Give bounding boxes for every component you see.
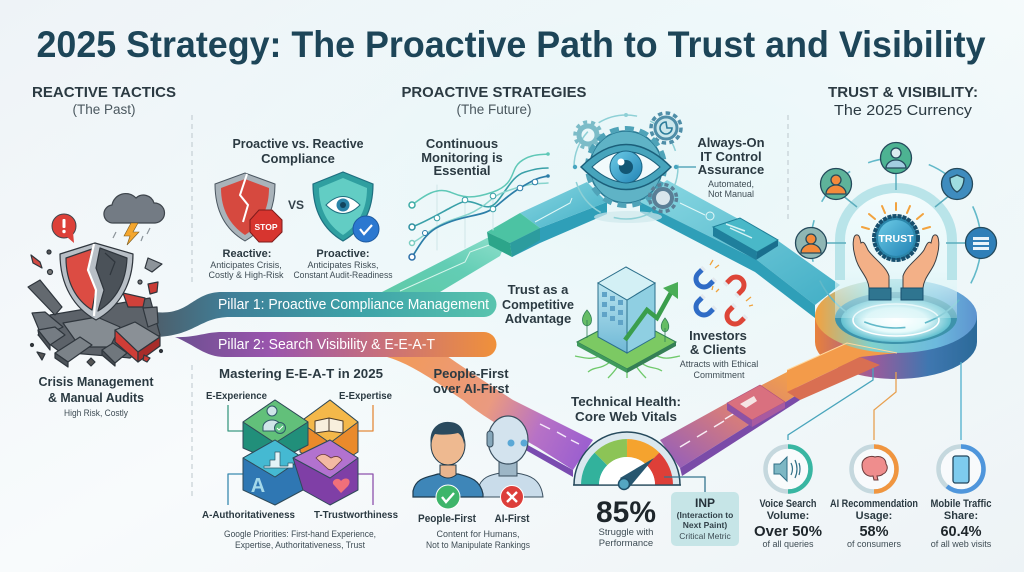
text: proactive vs reactive heading: Proactive vs. Reactive	[232, 136, 364, 151]
stat: 85 percent: 85%	[596, 496, 656, 529]
text: trust as competitive advantage: Trust as a	[508, 282, 569, 297]
text: google priorities: Google Priorities: First-hand Experience,	[224, 529, 376, 539]
text: people-first heading: People-First	[433, 366, 509, 381]
heading: proactive strategies: PROACTIVE STRATEGIES	[402, 84, 586, 101]
text: always-on assurance: Always-On	[697, 135, 765, 150]
line chart: monitoring	[409, 152, 550, 260]
text: proactive caption: Proactive:	[316, 248, 370, 260]
stat: mobile traffic: of all web visits	[931, 539, 992, 549]
stat: mobile traffic	[930, 446, 992, 549]
upper proactive road	[382, 180, 840, 318]
connectors: ring to stats	[788, 362, 961, 440]
text: proactive vs reactive heading: Compliance	[261, 151, 335, 166]
icon: reactive shield with stop sign	[215, 173, 282, 242]
text: investors and clients: Investors	[689, 328, 747, 343]
text: technical health heading	[571, 394, 681, 424]
text: people vs ai captions: Not to Manipulate Rankings	[426, 540, 530, 550]
text: proactive caption	[294, 248, 393, 280]
pillar 2 band: Pillar 2: Search Visibility & E-E-A-T	[218, 337, 435, 353]
heading: trust and visibility: TRUST & VISIBILITY:	[828, 84, 978, 101]
icon: trust dome with orbit	[811, 158, 981, 328]
text: people-first heading	[433, 366, 510, 396]
text: crisis management: Crisis Management	[38, 374, 154, 389]
icon: proactive shield with eye	[313, 172, 379, 242]
pillar 2 band	[175, 332, 496, 357]
stat: mobile traffic: Mobile Traffic	[930, 498, 992, 510]
e-e-a-t labels	[202, 390, 398, 521]
heading: proactive strategies: (The Future)	[456, 102, 532, 117]
callout: inp	[671, 492, 739, 546]
text: always-on assurance: Not Manual	[708, 189, 754, 199]
text: people-first heading: over AI-First	[433, 381, 510, 396]
text: reactive caption: Reactive:	[223, 248, 271, 260]
stat: ai recommendation: of consumers	[847, 539, 902, 549]
text: investors and clients: Attracts with Ethical	[680, 359, 758, 369]
stat: 85 percent: Struggle with	[599, 527, 653, 538]
text: investors and clients: & Clients	[690, 342, 746, 357]
callout: inp: Critical Metric	[679, 531, 731, 541]
stat: voice search: Volume:	[767, 510, 809, 522]
column dividers	[192, 115, 788, 500]
stat: ai recommendation: 58%	[859, 524, 889, 540]
icon: glass building with growth arrow	[575, 267, 680, 378]
text: continuous monitoring: Continuous	[426, 136, 498, 151]
text: continuous monitoring	[421, 136, 503, 178]
icon: check and cross badges	[436, 485, 524, 509]
icon: person	[413, 422, 483, 497]
stat: ai recommendation: AI Recommendation	[830, 498, 918, 510]
text: people vs ai captions: People-First	[418, 513, 476, 525]
text: trust as competitive advantage	[502, 282, 574, 326]
stat: ai recommendation: Usage:	[856, 510, 892, 522]
text: continuous monitoring: Essential	[433, 163, 491, 178]
text: people vs ai captions	[418, 513, 530, 550]
title: 2025 Strategy: The Proactive Path to Trust and Visibility	[36, 23, 986, 65]
diagram: e-e-a-t cubes: A	[251, 475, 265, 497]
text: proactive caption: Anticipates Risks,	[307, 260, 379, 270]
gauge: core web vitals	[573, 432, 705, 492]
stat: mobile traffic: 60.4%	[940, 524, 982, 540]
text: proactive caption: Constant Audit-Readiness	[294, 270, 393, 280]
icon: broken shield on rubble	[28, 243, 162, 367]
text: reactive caption: Anticipates Crisis,	[210, 260, 282, 270]
heading: proactive strategies	[402, 84, 586, 117]
icon: reactive shield with stop sign: STOP	[254, 222, 278, 232]
stat: ai recommendation	[830, 446, 918, 549]
stat: voice search: of all queries	[762, 539, 814, 549]
pillar 1 band	[155, 292, 496, 337]
icon: monitoring eye with gears	[573, 113, 696, 223]
e-e-a-t labels: A-Authoritativeness	[202, 509, 295, 521]
icon: trust dome with orbit: TRUST	[878, 233, 914, 245]
text: investors and clients: Commitment	[693, 370, 745, 380]
stat: voice search: Over 50%	[754, 524, 822, 540]
text: always-on assurance: IT Control	[700, 149, 762, 164]
icon: storm cloud	[104, 194, 165, 245]
e-e-a-t labels: E-Experience	[206, 390, 267, 402]
callout: inp: Next Paint)	[683, 520, 727, 530]
diagram: e-e-a-t cubes	[228, 400, 373, 505]
heading: reactive tactics	[32, 84, 176, 117]
icon: robot	[478, 416, 543, 497]
callout: inp: (Interaction to	[677, 510, 733, 520]
text: always-on assurance: Assurance	[698, 162, 764, 177]
text: continuous monitoring: Monitoring is	[421, 150, 503, 165]
text: crisis management	[38, 374, 154, 419]
icons: orbit nodes	[796, 142, 996, 258]
heading: trust and visibility	[828, 84, 978, 119]
text: people vs ai captions: AI-First	[494, 513, 530, 525]
text: vs: VS	[288, 198, 304, 212]
callout: inp: INP	[695, 496, 715, 510]
stat: voice search: Voice Search	[760, 498, 817, 510]
e-e-a-t labels: T-Trustworthiness	[314, 509, 398, 521]
text: investors and clients	[680, 328, 758, 380]
text: trust as competitive advantage: Advantage	[505, 311, 571, 326]
icon: alert bubble	[52, 214, 76, 243]
stat: 85 percent	[596, 496, 656, 549]
stat: mobile traffic: Share:	[944, 510, 978, 522]
heading: trust and visibility: The 2025 Currency	[834, 102, 973, 119]
heading: reactive tactics: (The Past)	[72, 102, 136, 117]
text: always-on assurance	[697, 135, 765, 199]
text: crisis management: & Manual Audits	[48, 390, 144, 405]
text: technical health heading: Core Web Vitals	[575, 409, 677, 424]
text: always-on assurance: Automated,	[708, 179, 754, 189]
stat: voice search	[754, 446, 822, 549]
text: mastering e-e-a-t heading: Mastering E-E-A-T in 2025	[219, 366, 383, 381]
icon: magnets	[693, 260, 753, 327]
trust ring platform	[787, 279, 977, 400]
e-e-a-t labels: E-Expertise	[339, 390, 392, 402]
text: technical health heading: Technical Health:	[571, 394, 681, 409]
lower visibility road	[383, 356, 800, 477]
text: trust as competitive advantage: Competitive	[502, 297, 574, 312]
text: proactive vs reactive heading	[232, 136, 364, 166]
text: google priorities: Expertise, Authoritativeness, Trust	[235, 540, 365, 550]
text: crisis management: High Risk, Costly	[64, 408, 128, 419]
heading: reactive tactics: REACTIVE TACTICS	[32, 84, 176, 101]
text: people vs ai captions: Content for Humans,	[436, 529, 520, 539]
text: google priorities	[224, 529, 376, 550]
stat: 85 percent: Performance	[599, 538, 653, 549]
pillar 1 band: Pillar 1: Proactive Compliance Management	[218, 297, 489, 313]
text: reactive caption: Costly & High-Risk	[208, 270, 284, 280]
text: reactive caption	[208, 248, 284, 280]
